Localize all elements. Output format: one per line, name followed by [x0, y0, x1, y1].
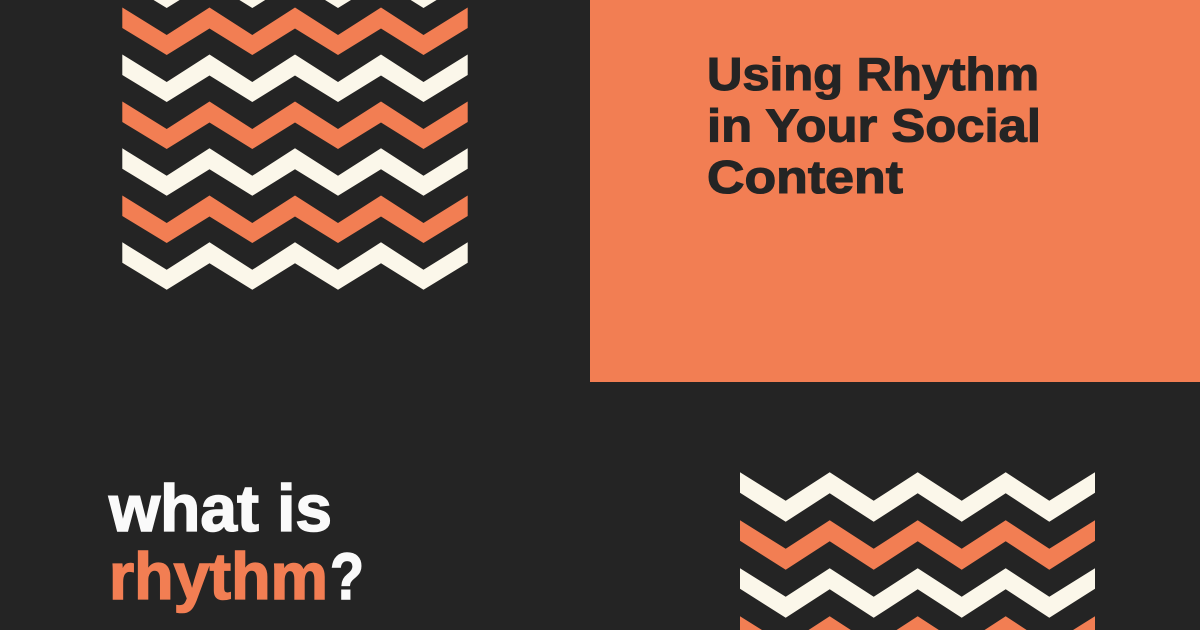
title: Content	[707, 151, 903, 203]
chevron pattern: top left	[122, 0, 468, 290]
chevron pattern: bottom right	[740, 472, 1095, 630]
panel: orange title block	[590, 0, 1200, 382]
heading: what is rhythm?: what is	[108, 471, 332, 545]
title	[707, 48, 1041, 203]
heading: what is rhythm?	[108, 471, 364, 613]
heading: what is rhythm?: rhythm	[109, 539, 328, 613]
title: in Your Social	[707, 100, 1041, 152]
title: Using Rhythm	[707, 48, 1039, 100]
heading: what is rhythm?: ?	[330, 539, 364, 613]
